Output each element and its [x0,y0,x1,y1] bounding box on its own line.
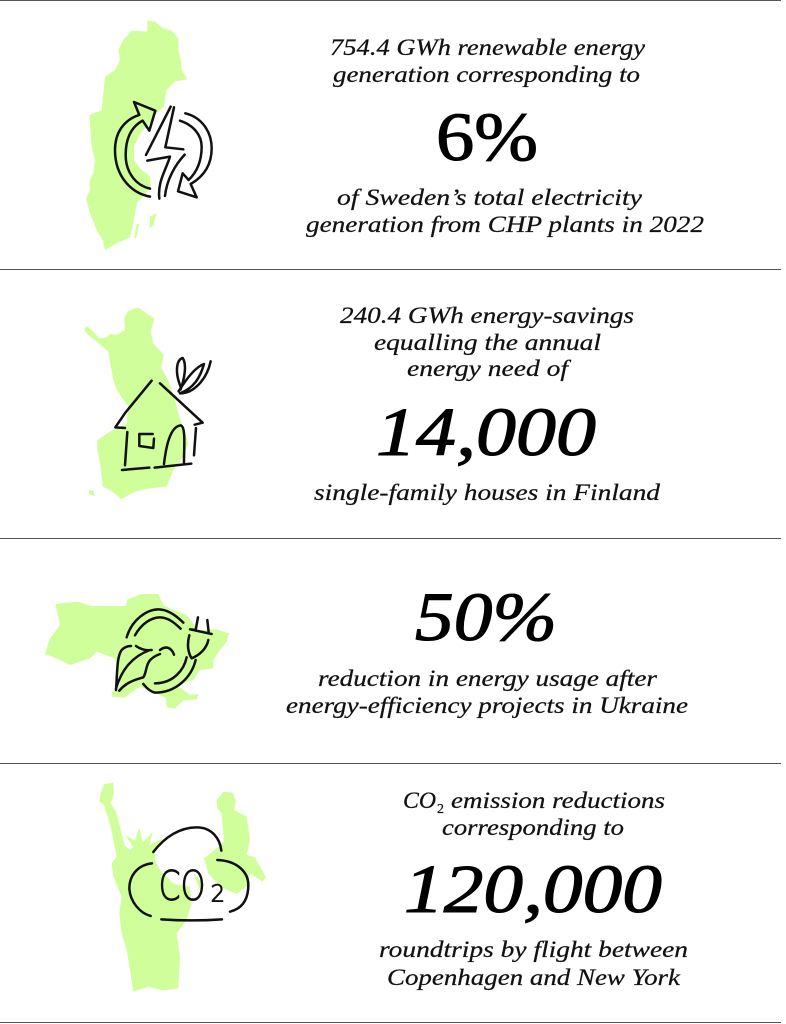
plug and leaf drawing [116,609,212,693]
icon: Sweden map with lightning and arrows [86,21,212,250]
text: Copenhagen and New York: Copenhagen and New York [387,965,681,990]
text: renewable generation: 754.4 GWh renewable energy [330,35,646,60]
icon: Ukraine map with plug and leaf [45,594,229,708]
CO2 subscript: 2 [211,881,225,907]
text: energy savings: 240.4 GWh energy-savings [340,303,634,328]
icon: Statue of Liberty, Little Mermaid and CO2 cloud [99,783,266,992]
house and leaves drawing [115,358,211,470]
text: CO2 emission reductions [403,788,665,817]
text: reduction: reduction in energy usage after [318,666,658,691]
text: CO2 emission reductions: emission reductions [451,788,665,813]
panel: Ukraine energy usage [45,579,688,718]
text: houses in Finland: single-family houses in Finland [314,480,661,505]
icon: Finland map with house and leaves [84,308,211,499]
panel: CO2 emission reductions [99,783,688,992]
landmarks silhouette [99,783,266,992]
text: corresponding: corresponding to [442,815,624,840]
Ukraine map [45,594,229,708]
text: share of Sweden: of Sweden’s total electricity [337,185,643,210]
text: roundtrips: roundtrips by flight between [379,937,688,962]
stat: 14,000: 14,000 [376,394,596,470]
text: energy need: energy need of [407,356,572,381]
text: projects in Ukraine: energy-efficiency projects in Ukraine [286,693,688,718]
stat: 50%: 50% [415,579,557,655]
text: CO2 emission reductions: CO [403,788,436,813]
CO label: CO [159,862,205,910]
panel: Sweden renewable energy [86,21,704,250]
Sweden map [86,21,187,250]
text: corresponding: generation corresponding to [333,62,640,87]
cloud and CO2 drawing [129,827,248,920]
Finland map [84,308,188,499]
panel: Finland energy savings [84,303,661,505]
recycling arrows and lightning bolt [115,102,212,199]
stat: 120,000: 120,000 [404,851,662,927]
text: CO2 emission reductions: 2 [437,802,444,817]
text: CHP plants: generation from CHP plants in 2022 [306,212,704,237]
text: equalling: equalling the annual [374,330,601,355]
stat: 6%: 6% [436,99,538,175]
